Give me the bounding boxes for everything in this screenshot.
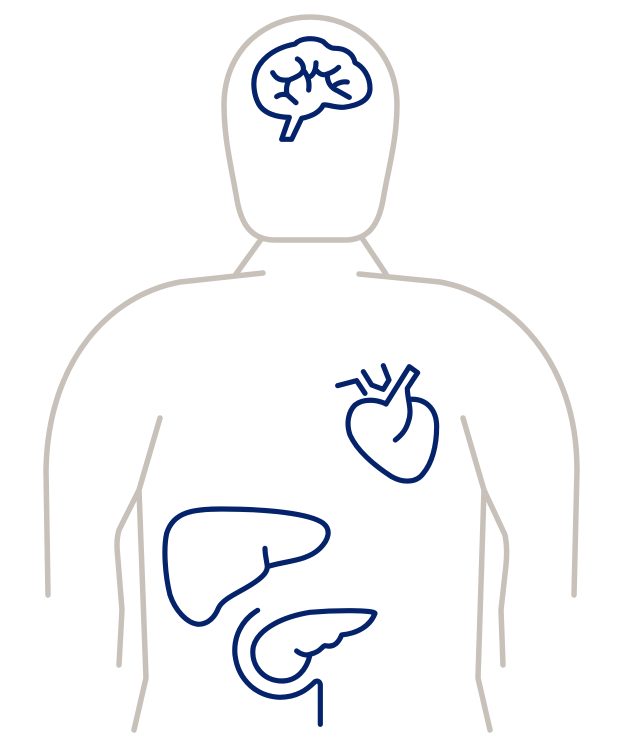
pancreas: [253, 611, 375, 681]
upper vessels: [338, 366, 389, 393]
icon: heart: [338, 366, 437, 481]
brain folds: [273, 59, 349, 103]
icon: brain: [254, 39, 370, 139]
heart body: [348, 399, 437, 481]
left torso side: [117, 418, 160, 730]
neck: [236, 238, 386, 274]
right torso side: [463, 418, 507, 730]
left shoulder and arm: [46, 273, 263, 595]
head: [224, 17, 397, 240]
aorta and inner vessel: [386, 367, 418, 440]
icon: liver and pancreas: [165, 509, 375, 724]
duodenum: [235, 610, 320, 724]
right shoulder and arm: [359, 274, 577, 595]
liver: [165, 509, 328, 624]
brain outline: [254, 39, 370, 139]
